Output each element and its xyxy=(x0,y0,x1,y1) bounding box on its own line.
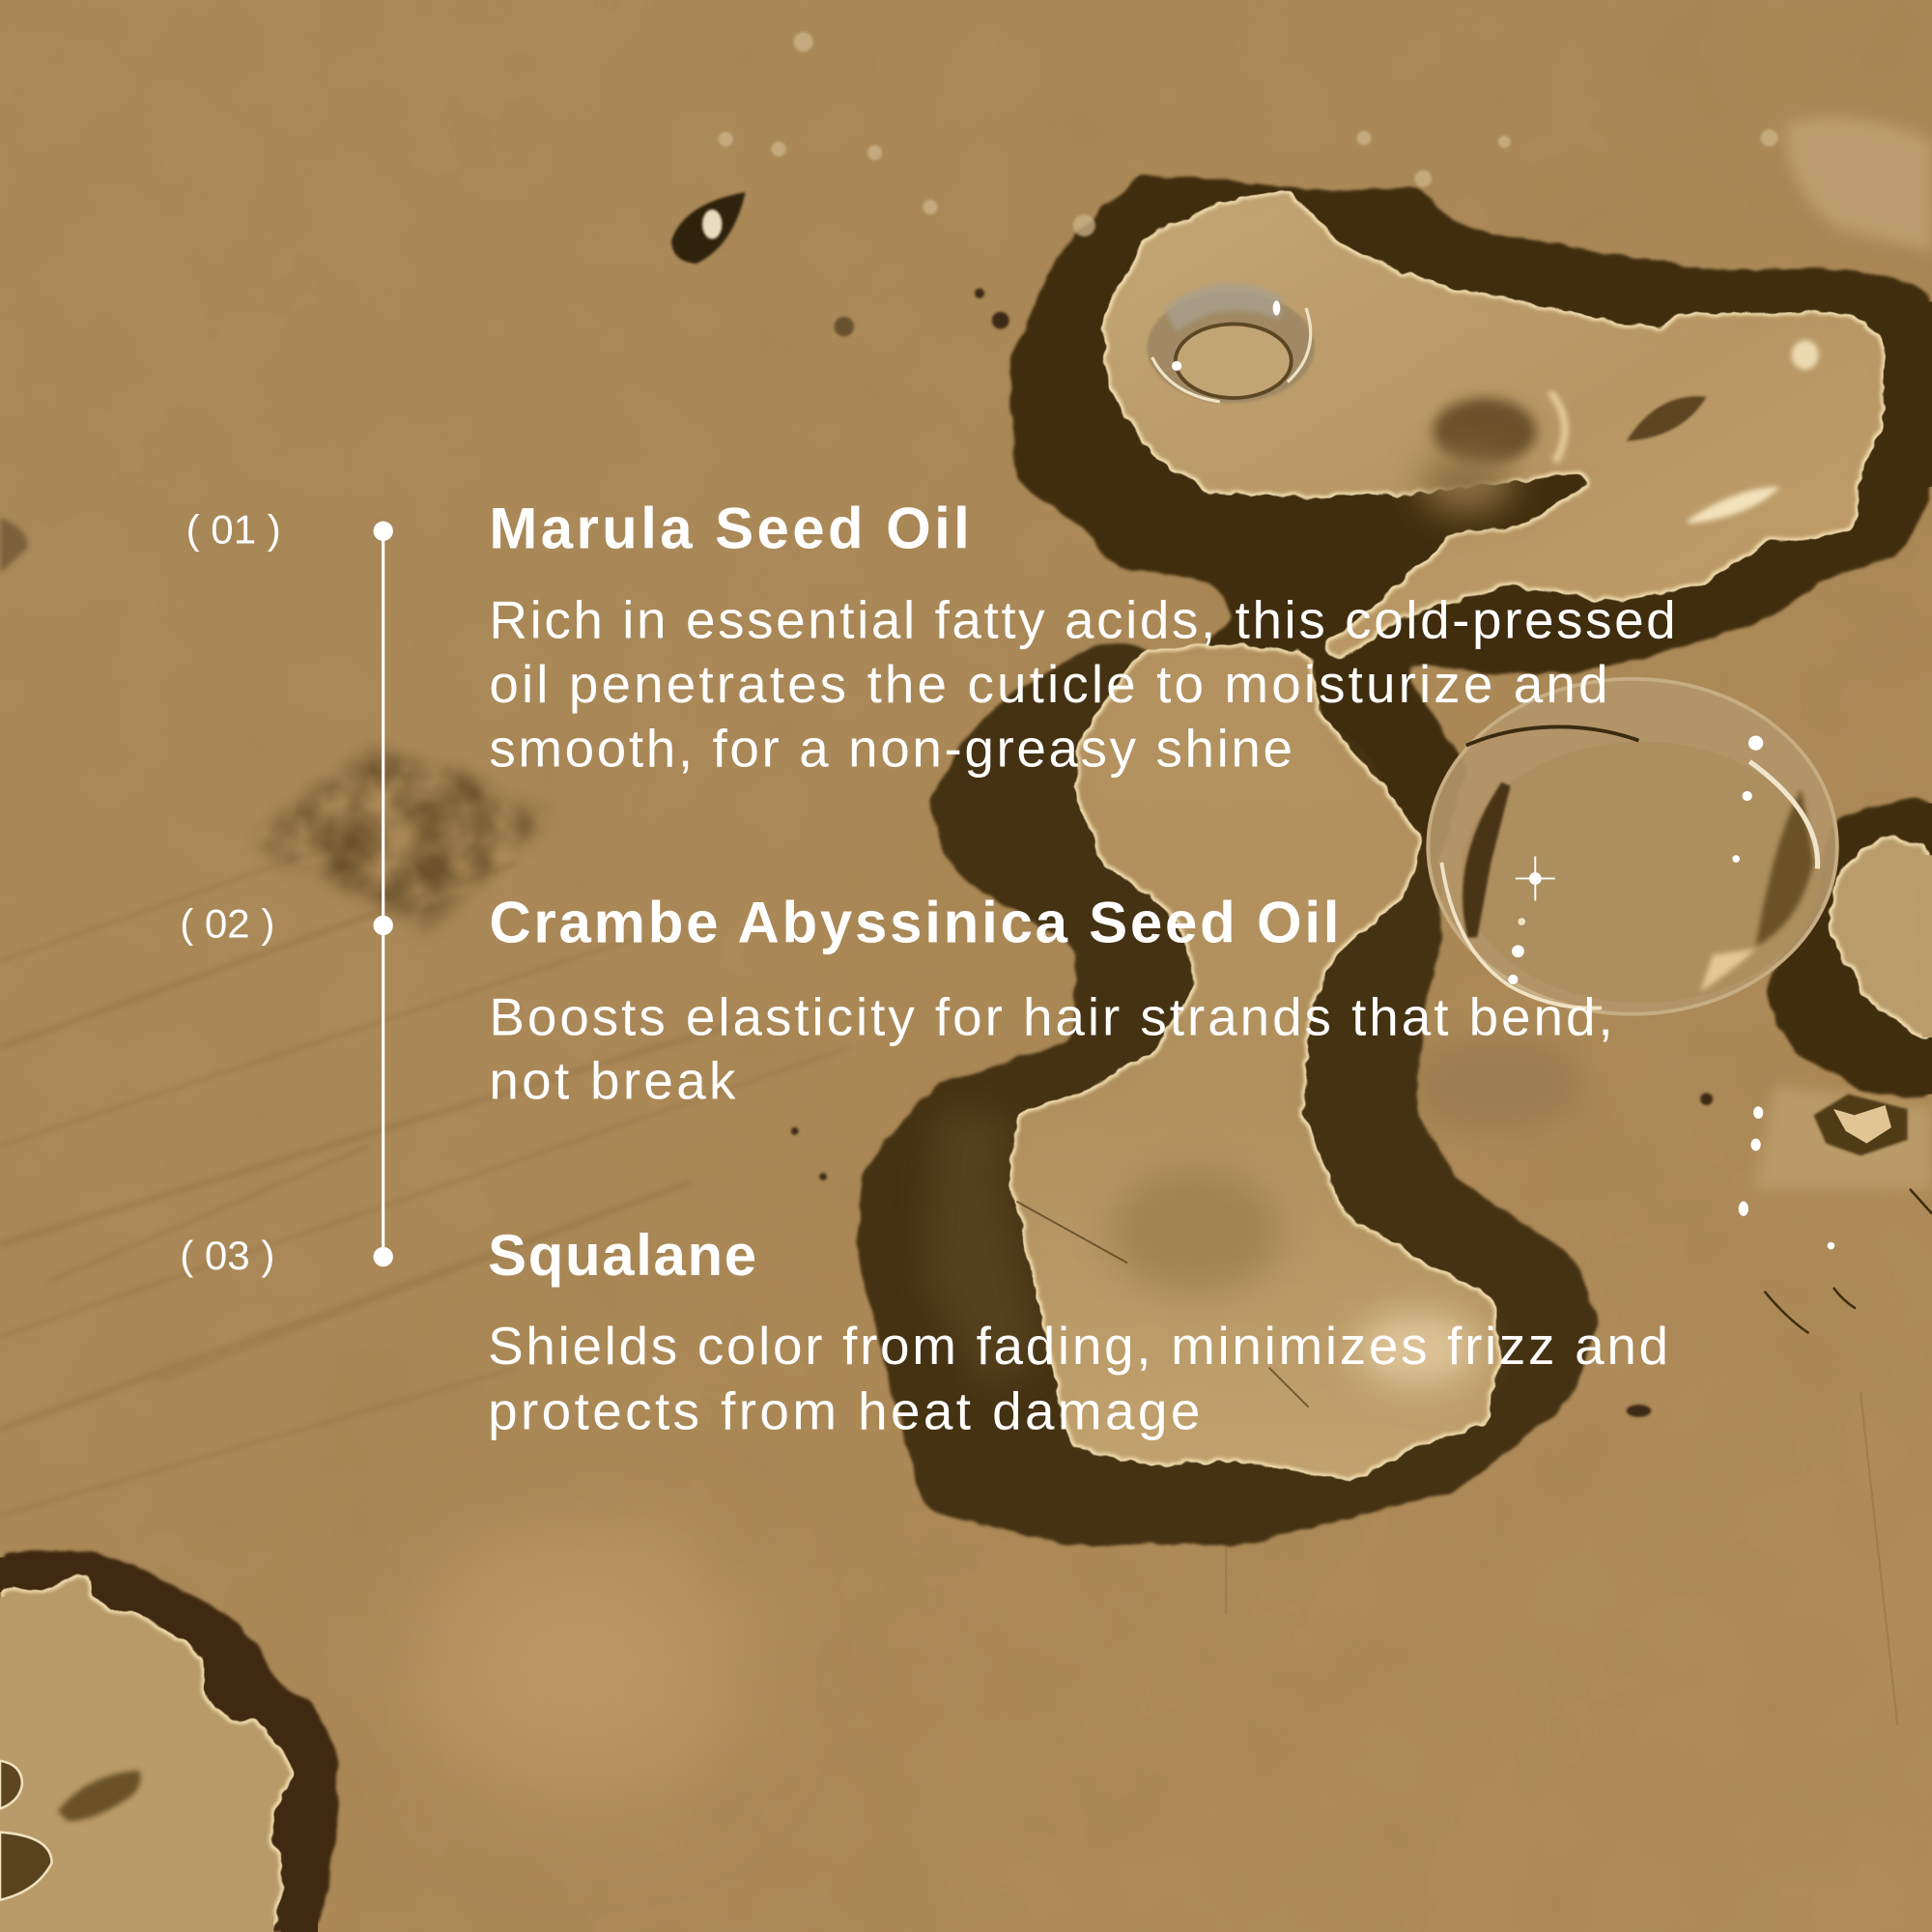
item 01: Marula Seed Oil xyxy=(186,497,1676,778)
droplet on upper pool xyxy=(1148,283,1315,403)
item 02: Crambe Abyssinica Seed Oil xyxy=(180,891,1613,1111)
item 01: Marula Seed Oil: oil penetrates the cuticle to moisturize and xyxy=(489,654,1608,714)
item 03: Squalane: Shields color from fading, minimizes frizz and xyxy=(488,1316,1668,1376)
small oil droplets xyxy=(0,32,1932,1417)
lower oil pool xyxy=(1008,643,1501,1481)
timeline with three markers xyxy=(373,522,393,1266)
bottom-left oil pool xyxy=(0,1551,337,1932)
item 03: Squalane xyxy=(180,1223,1668,1441)
oil puddle: dark shadow band xyxy=(856,174,1932,1545)
item 02: Crambe Abyssinica Seed Oil: ( 02 ) xyxy=(180,901,274,947)
item 03: Squalane: Squalane xyxy=(488,1223,756,1288)
item 01: Marula Seed Oil: ( 01 ) xyxy=(186,506,281,552)
item 03: Squalane: protects from heat damage xyxy=(488,1381,1200,1441)
large bubble xyxy=(1427,678,1838,1015)
textured patch on surface xyxy=(252,746,549,930)
right-edge pool xyxy=(1826,836,1932,1046)
item 01: Marula Seed Oil: Rich in essential fatty acids, this cold-pressed xyxy=(489,590,1676,650)
item 01: Marula Seed Oil: Marula Seed Oil xyxy=(489,497,970,561)
item 02: Crambe Abyssinica Seed Oil: Boosts elasticity for hair strands that bend, xyxy=(489,986,1613,1046)
item 02: Crambe Abyssinica Seed Oil: Crambe Abyssinica Seed Oil xyxy=(489,891,1339,955)
upper oil pool xyxy=(1101,188,1884,659)
item 02: Crambe Abyssinica Seed Oil: not break xyxy=(489,1051,736,1111)
item 01: Marula Seed Oil: smooth, for a non-greasy shine xyxy=(489,718,1293,778)
item 03: Squalane: ( 03 ) xyxy=(180,1233,274,1278)
